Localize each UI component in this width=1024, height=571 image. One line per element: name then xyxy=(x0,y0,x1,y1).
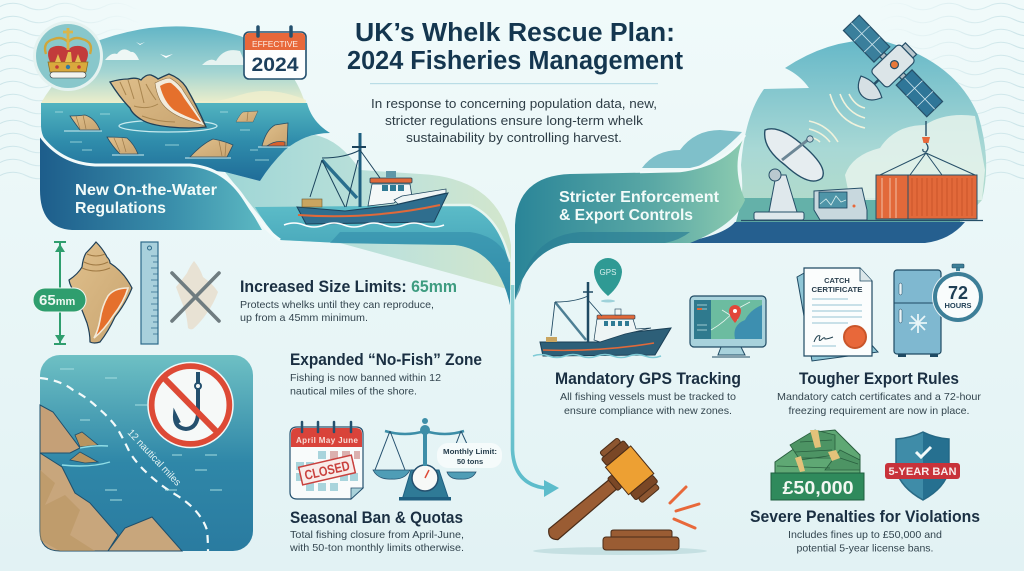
text: tougher export rules xyxy=(777,370,982,417)
icon: closed calendar: CLOSED xyxy=(303,458,351,483)
text: tougher export rules: Mandatory catch certificates and a 72-hour xyxy=(777,391,982,403)
panel: no-fish zone map: 12 nautical miles xyxy=(125,428,183,488)
text: severe penalties for violations: potential 5-year license bans. xyxy=(796,542,934,554)
banner: stricter enforcement and export controls: Stricter Enforcement xyxy=(559,189,720,206)
icon: catch certificate xyxy=(797,268,878,361)
central flow swoosh xyxy=(225,135,511,305)
text: increased size limits: up from a 45mm minimum. xyxy=(240,312,368,324)
icon: 65mm shell measure: 65mm xyxy=(39,292,75,309)
icon: freezer with 72 hour timer: HOURS xyxy=(944,301,972,310)
text: expanded no-fish zone: Expanded “No-Fish” Zone xyxy=(290,351,482,369)
panel: right enforcement scene xyxy=(642,40,986,222)
intro text xyxy=(371,96,657,145)
flow arrow xyxy=(512,285,559,497)
icon: monitoring console xyxy=(814,188,867,220)
text: severe penalties for violations: Severe Penalties for Violations xyxy=(750,508,980,526)
icon: cargo container on crane hook xyxy=(741,121,983,220)
icon: scale with monthly limit: 50 tons xyxy=(457,457,483,466)
icon: closed calendar xyxy=(290,422,363,499)
banner: stricter enforcement and export controls xyxy=(515,135,965,300)
icon: catch certificate: CATCH xyxy=(824,276,850,285)
icon: satellite dish xyxy=(754,129,823,220)
icon: gavel impact sparks xyxy=(670,487,699,528)
icon: closed calendar: April May June xyxy=(296,436,359,445)
banner: stricter enforcement and export controls: & Export Controls xyxy=(559,207,693,224)
text: increased size limits: Protects whelks until they can reproduce, xyxy=(240,299,434,311)
icon: no fishing sign xyxy=(148,362,233,448)
text: seasonal ban and quotas: Total fishing closure from April-June, xyxy=(290,529,464,541)
text: expanded no-fish zone xyxy=(290,351,482,398)
icon: signal waves xyxy=(809,94,865,142)
banner: new on-the-water regulations xyxy=(40,135,280,240)
icon: gps monitor map xyxy=(690,296,766,357)
banner: new on-the-water regulations: New On-the-Water xyxy=(75,182,217,199)
text: mandatory gps tracking: ensure compliance with new zones. xyxy=(564,405,732,417)
text: seasonal ban and quotas xyxy=(289,509,464,554)
icon: effective 2024 calendar: EFFECTIVE xyxy=(252,39,298,49)
intro text: sustainability by controlling harvest. xyxy=(406,130,622,145)
icon: stack of money £50,000: £50,000 xyxy=(782,477,854,498)
text: seasonal ban and quotas: Seasonal Ban & Quotas xyxy=(290,509,463,527)
icon: gps tagged boat: GPS xyxy=(600,268,616,277)
banner: new on-the-water regulations: Regulations xyxy=(75,200,166,217)
icon: effective 2024 calendar: 2024 xyxy=(252,55,299,76)
text: severe penalties for violations xyxy=(750,508,980,554)
text: expanded no-fish zone: Fishing is now banned within 12 xyxy=(290,372,441,384)
icon: rejected small shell xyxy=(172,261,219,329)
text: increased size limits: Increased Size Limits: 65mm xyxy=(240,278,457,296)
icon: freezer with 72 hour timer xyxy=(894,264,984,357)
icon: fishing boat xyxy=(284,133,448,227)
text: mandatory gps tracking: Mandatory GPS Tracking xyxy=(555,370,741,388)
text: severe penalties for violations: Includes fines up to £50,000 and xyxy=(788,529,942,541)
title: UK’s Whelk Rescue Plan: xyxy=(355,19,675,47)
icon: large whelk shell xyxy=(110,74,217,132)
icon: satellite xyxy=(820,5,953,139)
intro text: stricter regulations ensure long-term whelk xyxy=(385,113,644,128)
icon: small whelks in water xyxy=(64,111,290,158)
intro text: In response to concerning population data, new, xyxy=(371,96,657,111)
panel: left sea scene xyxy=(41,26,330,181)
title: 2024 Fisheries Management xyxy=(347,47,684,75)
text: tougher export rules: freezing requirement are now in place. xyxy=(788,405,970,417)
background xyxy=(0,3,1024,180)
icon: gps tagged boat xyxy=(533,258,671,358)
icon: gavel xyxy=(529,434,707,562)
icon: catch certificate: CERTIFICATE xyxy=(812,285,862,294)
text: mandatory gps tracking: All fishing vessels must be tracked to xyxy=(560,391,736,403)
icon: 5-year ban shield: 5-YEAR BAN xyxy=(888,466,957,478)
icon: ruler xyxy=(141,242,158,344)
text: seasonal ban and quotas: with 50-ton monthly limits otherwise. xyxy=(289,542,464,554)
icon: 65mm shell measure xyxy=(33,242,132,344)
text: increased size limits xyxy=(240,278,457,324)
icon: stack of money £50,000 xyxy=(771,430,864,500)
text: expanded no-fish zone: nautical miles of the shore. xyxy=(290,386,417,398)
text: tougher export rules: Tougher Export Rules xyxy=(799,370,959,388)
icon: 5-year ban shield xyxy=(885,432,960,500)
icon: royal crown medallion xyxy=(33,21,103,91)
icon: effective 2024 calendar xyxy=(244,27,306,79)
text: mandatory gps tracking xyxy=(555,370,741,417)
icon: scale with monthly limit: Monthly Limit: xyxy=(443,447,497,456)
panel: no-fish zone map xyxy=(40,355,253,551)
icon: freezer with 72 hour timer: 72 xyxy=(948,283,968,303)
title xyxy=(347,19,684,75)
icon: scale with monthly limit xyxy=(373,418,502,500)
